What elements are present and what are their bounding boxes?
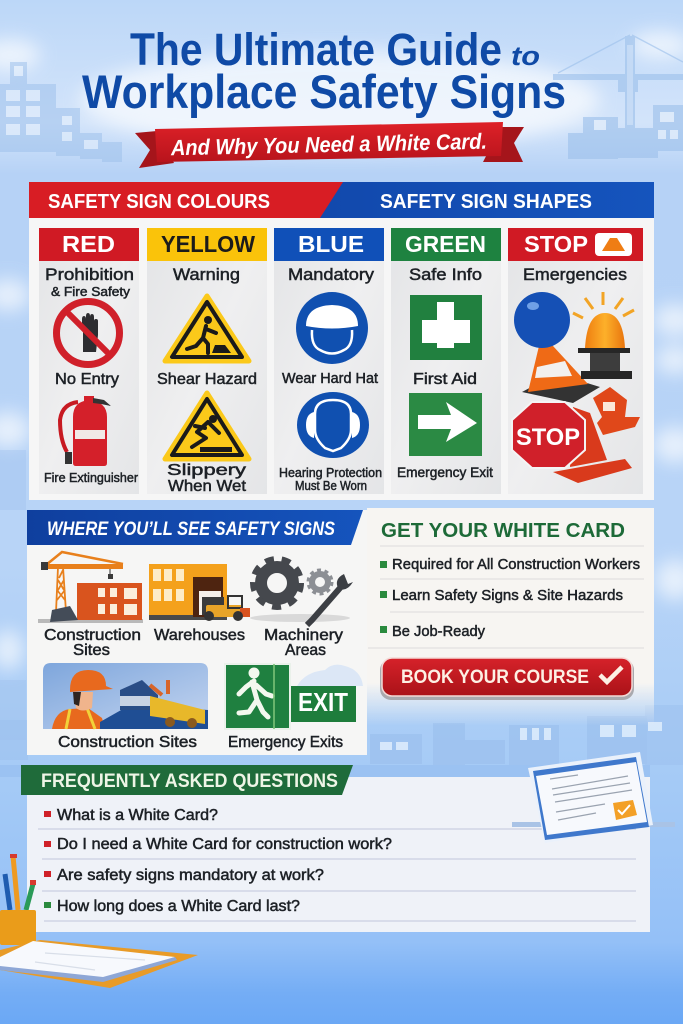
title: Workplace Safety Signs	[82, 65, 566, 118]
panel: get your white card: GET YOUR WHITE CARD	[381, 520, 625, 542]
subtitle ribbon: And Why You Need a White Card.	[170, 129, 487, 160]
panel: where you'll see safety signs: Sites	[73, 642, 110, 659]
column: blue: Must Be Worn	[295, 479, 367, 493]
icon: first aid cross	[410, 295, 482, 360]
icon: gears and wrench	[250, 559, 353, 625]
icon: pencil cup	[0, 854, 36, 945]
column: green: First Aid	[413, 371, 477, 388]
column: green: GREEN	[405, 231, 486, 257]
column: yellow: Slippery	[167, 462, 246, 479]
button: book your course: BOOK YOUR COURSE	[401, 667, 589, 688]
panel: where you'll see safety signs: Areas	[285, 642, 326, 659]
column: blue: Wear Hard Hat	[282, 371, 378, 387]
column: stop	[508, 228, 643, 494]
column: yellow: When Wet	[168, 478, 247, 495]
section header: WHERE YOU’LL SEE SAFETY SIGNS	[47, 519, 335, 540]
panel: where you'll see safety signs: Construction Sites	[58, 734, 197, 751]
panel: where you'll see safety signs: Construction	[44, 627, 141, 644]
icon: no entry sign	[56, 302, 120, 364]
icon: fallen red cone and small marker	[553, 387, 640, 483]
icon: exit sign	[225, 664, 363, 729]
column: yellow: Warning	[173, 266, 240, 284]
icon: clipboard	[0, 940, 198, 988]
column: yellow	[147, 228, 267, 495]
title: The Ultimate Guide	[130, 24, 502, 75]
FAQ item 1: What is a White Card?	[57, 807, 218, 824]
panel: where you'll see safety signs	[27, 510, 367, 755]
FAQ item 3: Are safety signs mandatory at work?	[57, 867, 324, 884]
column: blue: BLUE	[298, 231, 364, 257]
icon: hearing protection sign	[297, 392, 369, 458]
column: red	[39, 228, 139, 494]
icon: warehouse and forklift	[149, 564, 250, 621]
icon: crane and building	[38, 552, 143, 623]
FAQ heading: FREQUENTLY ASKED QUESTIONS	[41, 771, 338, 792]
icon: slippery triangle	[165, 393, 249, 459]
panel: where you'll see safety signs: Machinery	[264, 627, 343, 644]
list item: required: Required for All Construction Workers	[392, 556, 640, 573]
icon: stop sign: STOP	[516, 424, 580, 451]
title	[82, 24, 566, 118]
icon: emergency exit arrow	[409, 393, 482, 456]
list item: job-ready: Be Job-Ready	[392, 623, 485, 640]
column: green	[391, 228, 501, 494]
column: blue	[274, 228, 384, 494]
panel: where you'll see safety signs: Emergency Exits	[228, 734, 343, 751]
column: blue: Mandatory	[288, 266, 375, 284]
image: construction worker and machine	[43, 663, 208, 729]
column: green: Emergency Exit	[397, 464, 493, 480]
icon: traffic cone with blue ball	[514, 292, 600, 403]
panel: get your white card	[367, 508, 654, 726]
column: yellow: YELLOW	[161, 231, 255, 257]
panel: where you'll see safety signs: Warehouses	[154, 627, 245, 644]
column: stop: Emergencies	[523, 266, 627, 284]
button: book your course	[380, 658, 634, 700]
panel: frequently asked questions	[21, 765, 650, 932]
icon: white card document	[512, 752, 675, 843]
icon: fire extinguisher	[60, 396, 111, 466]
subtitle ribbon	[135, 122, 524, 168]
column: blue: Hearing Protection	[279, 466, 382, 480]
icon: stop header cone badge	[595, 233, 632, 256]
column: red: No Entry	[55, 371, 119, 388]
header bar: colours and shapes: SAFETY SIGN SHAPES	[380, 191, 592, 213]
background skyline mid	[0, 705, 683, 765]
background crane and skyline right	[553, 35, 683, 159]
list item: learn: Learn Safety Signs & Site Hazards	[392, 587, 623, 604]
FAQ heading	[21, 765, 353, 795]
column: green: Safe Info	[409, 266, 482, 284]
icon: warning beacon	[573, 292, 634, 379]
header bar: colours and shapes: SAFETY SIGN COLOURS	[48, 191, 270, 213]
blue band above FAQ	[0, 765, 650, 777]
column: red: Fire Extinguisher	[44, 470, 139, 485]
column: yellow: Shear Hazard	[157, 371, 257, 388]
panel: safety signs	[29, 182, 654, 500]
icon: stop sign	[512, 402, 585, 468]
background clouds	[0, 31, 683, 670]
column: red: RED	[62, 231, 115, 257]
title: to	[511, 41, 540, 71]
FAQ item 4: How long does a White Card last?	[57, 898, 300, 915]
column: stop: STOP	[524, 231, 588, 257]
FAQ item 2: Do I need a White Card for construction work?	[57, 836, 392, 853]
column: red: Prohibition	[45, 265, 134, 284]
header bar: colours and shapes	[29, 182, 654, 218]
column: red: & Fire Safety	[51, 285, 131, 299]
icon: exit sign: EXIT	[298, 687, 348, 717]
background skyline left	[0, 62, 122, 740]
icon: shear hazard triangle	[165, 296, 249, 361]
section header	[27, 510, 363, 545]
icon: hard hat sign	[296, 292, 368, 364]
